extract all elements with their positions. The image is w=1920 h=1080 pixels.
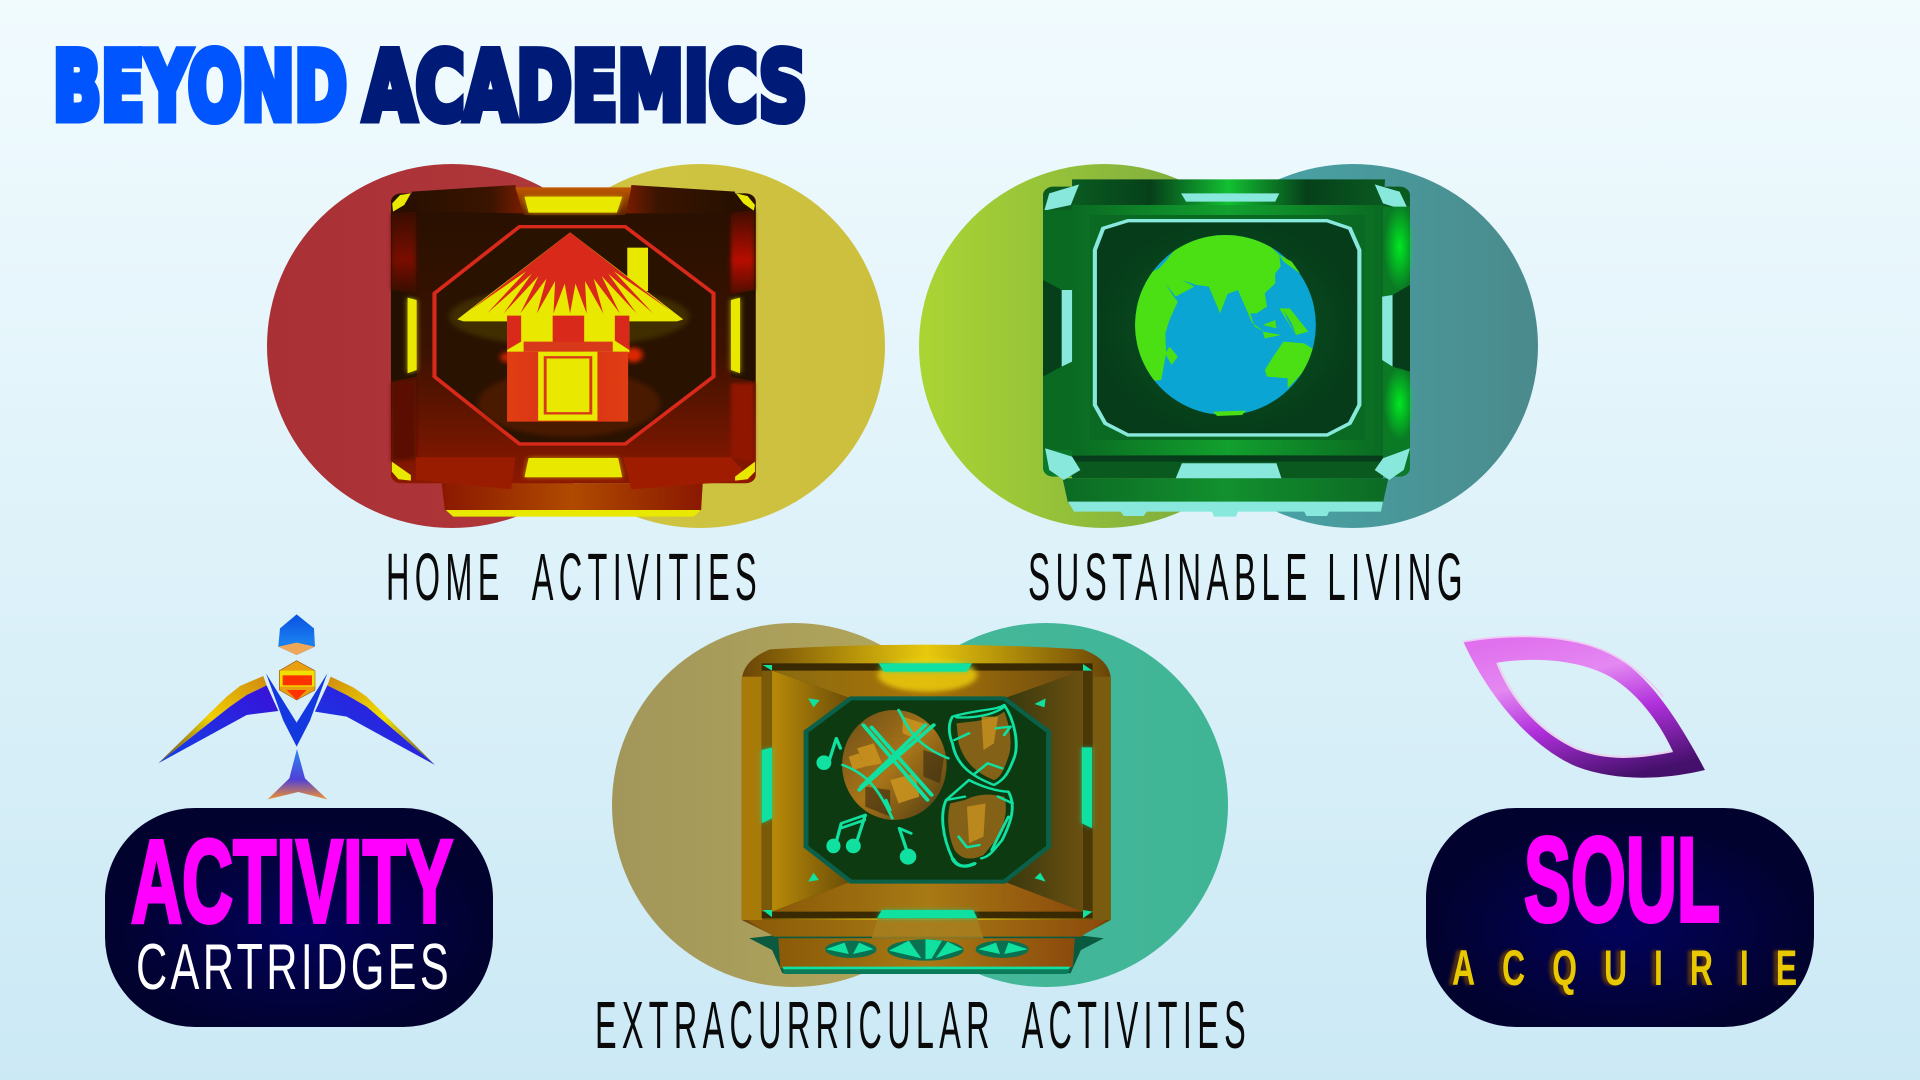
panel: sustainable living: SUSTAINABLE LIVING xyxy=(1028,540,1468,615)
pill badge xyxy=(1426,808,1814,1027)
title word: beyond: BEYOND xyxy=(53,33,347,142)
infographic canvas: EXTRACURRICULAR ACTIVITIES xyxy=(595,988,1251,1063)
circle: lime xyxy=(919,164,1289,528)
icon: bird emblem xyxy=(158,614,435,799)
panel: activity cartridges logo xyxy=(105,614,493,1027)
title xyxy=(53,33,807,142)
panel: extracurricular activities xyxy=(595,623,1251,1063)
panel: sustainable living xyxy=(919,164,1538,615)
panel: soul acquirie logo xyxy=(1426,636,1824,1027)
circle: olive xyxy=(612,623,976,987)
pill badge xyxy=(105,808,493,1027)
label: soul: SOUL xyxy=(1524,813,1720,947)
gems on base xyxy=(825,939,1029,961)
panel: home activities xyxy=(267,164,885,615)
title word: academics: ACADEMICS xyxy=(364,33,807,142)
icon: home cartridge xyxy=(391,185,756,517)
circle: teal xyxy=(1168,164,1538,528)
panel: home activities: HOME ACTIVITIES xyxy=(386,540,762,615)
circle: yellow xyxy=(515,164,885,528)
circle: red xyxy=(267,164,637,528)
circle: green xyxy=(864,623,1228,987)
icon: purple leaf xyxy=(1463,636,1705,778)
icon: arts cartridge xyxy=(742,645,1111,974)
label: cartridges: CARTRIDGES xyxy=(136,930,452,1003)
label: activity: ACTIVITY xyxy=(131,816,453,948)
icon: earth cartridge xyxy=(1043,179,1415,517)
